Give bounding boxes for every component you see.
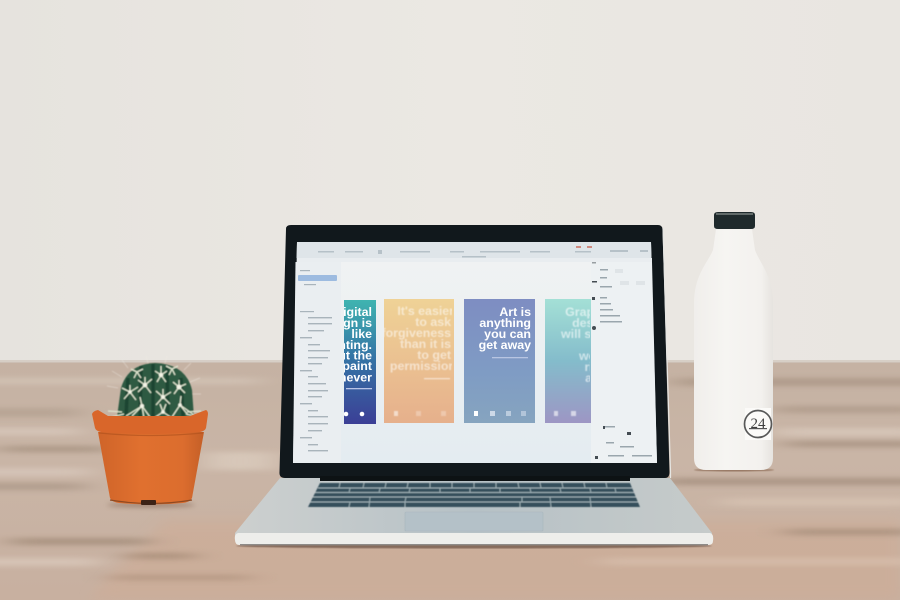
quote card 1: But the	[329, 348, 372, 362]
quote card 1: like	[351, 327, 372, 341]
bottle body	[694, 229, 773, 470]
quote card 3	[464, 299, 535, 423]
quote card 3: you can	[484, 327, 531, 341]
laptop base	[235, 478, 713, 545]
pot rim	[92, 410, 208, 434]
trackpad	[405, 512, 543, 531]
quote card 4: world	[578, 349, 612, 363]
quote card 1	[344, 300, 376, 424]
quote card 2: to get	[417, 348, 451, 362]
quote card 2: than it is	[400, 337, 451, 351]
quote card 2: to ask	[415, 315, 451, 329]
background wall	[0, 0, 900, 362]
quote card 2: forgiveness	[381, 326, 451, 340]
bottle logo: 24: 24	[750, 416, 766, 432]
app toolbar	[296, 242, 652, 262]
quote card 4	[545, 299, 591, 423]
quote card 1: Design is	[317, 316, 372, 330]
bottle cap	[714, 212, 755, 229]
left layers sidebar	[293, 262, 341, 463]
quote card 2: permission	[390, 359, 456, 373]
bottle	[694, 212, 774, 472]
quote card 1: never	[339, 370, 372, 384]
quote card 1: paint	[342, 359, 372, 373]
quote card 1: Digital	[334, 305, 372, 319]
quote card 4: will save	[560, 327, 612, 341]
quote card 4: right	[584, 360, 612, 374]
bottle logo: 24	[744, 408, 772, 440]
quote card 3: Art is	[499, 305, 531, 319]
quote card 4: after	[585, 371, 612, 385]
quote card 4: Graphic	[565, 305, 612, 319]
keyboard	[308, 483, 640, 507]
quote card 3: anything	[479, 316, 531, 330]
quote card 4: design	[572, 316, 612, 330]
cactus	[107, 356, 201, 418]
plant: potted cactus	[92, 356, 208, 508]
wooden table	[0, 360, 900, 600]
pot body	[98, 432, 204, 504]
laptop lid	[279, 225, 670, 478]
screen	[293, 242, 657, 463]
quote card 2: It's easier	[397, 304, 454, 318]
right inspector panel	[591, 262, 657, 463]
quote card 3: get away	[479, 338, 531, 352]
quote card 2	[381, 299, 456, 423]
laptop	[235, 225, 713, 548]
quote card 1: painting.	[320, 338, 372, 352]
